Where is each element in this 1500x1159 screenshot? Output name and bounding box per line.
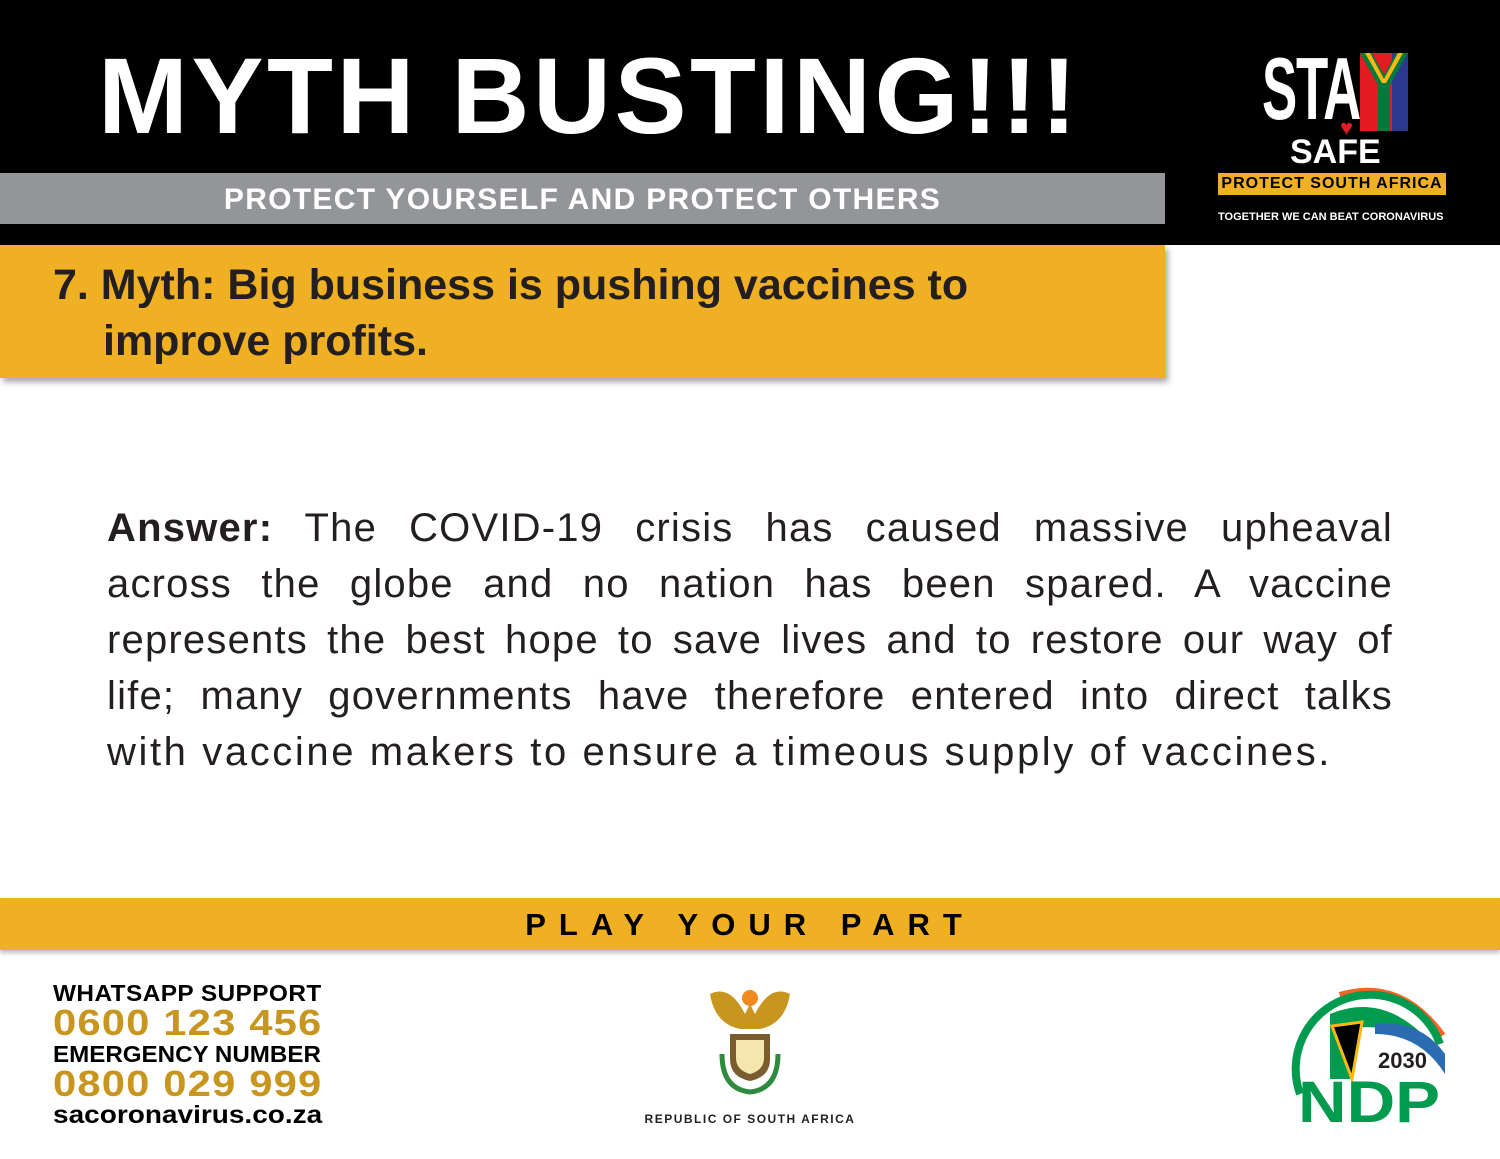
logo: stay safe: PROTECT SOUTH AFRICA: [1221, 175, 1443, 192]
answer text: represents the best hope to save lives and to restore our way of: [107, 618, 1393, 662]
logo: stay safe: SAFE: [1290, 133, 1381, 171]
answer text: life; many governments have therefore entered into direct talks: [107, 674, 1393, 718]
coat of arms: [710, 990, 790, 1094]
logo: stay safe: ♥: [1340, 115, 1353, 140]
logo: stay safe: TOGETHER WE CAN BEAT CORONAVIRUS: [1218, 211, 1444, 223]
answer text: [107, 506, 1393, 774]
logo: stay safe: [1218, 39, 1446, 223]
contact info: 0800 029 999: [53, 1063, 322, 1104]
play your part band: PLAY YOUR PART: [525, 907, 975, 942]
contact info: 0600 123 456: [53, 1002, 322, 1043]
answer text: across the globe and no nation has been spared. A vaccine: [107, 562, 1393, 606]
contact info: [53, 980, 322, 1129]
myth heading box: 7. Myth: Big business is pushing vaccines to: [53, 261, 968, 309]
title: MYTH BUSTING!!!: [98, 35, 1080, 156]
subtitle bar: PROTECT YOURSELF AND PROTECT OTHERS: [224, 183, 941, 216]
answer text: Answer: The COVID-19 crisis has caused massive upheaval: [107, 506, 1393, 550]
contact info: sacoronavirus.co.za: [53, 1101, 322, 1129]
myth heading box: improve profits.: [103, 317, 428, 365]
NDP logo: [1292, 988, 1446, 1129]
NDP logo: 2030: [1378, 1048, 1427, 1073]
answer text: with vaccine makers to ensure a timeous supply of vaccines.: [107, 730, 1332, 774]
subtitle bar: [0, 173, 1165, 224]
contact info: WHATSAPP SUPPORT: [53, 980, 322, 1006]
contact info: EMERGENCY NUMBER: [53, 1041, 321, 1067]
logo: stay safe: STA: [1262, 39, 1360, 138]
play your part band: [0, 898, 1500, 950]
coat caption: REPUBLIC OF SOUTH AFRICA: [645, 1112, 855, 1126]
header black band: [0, 0, 1500, 245]
myth heading box: [0, 245, 1165, 378]
